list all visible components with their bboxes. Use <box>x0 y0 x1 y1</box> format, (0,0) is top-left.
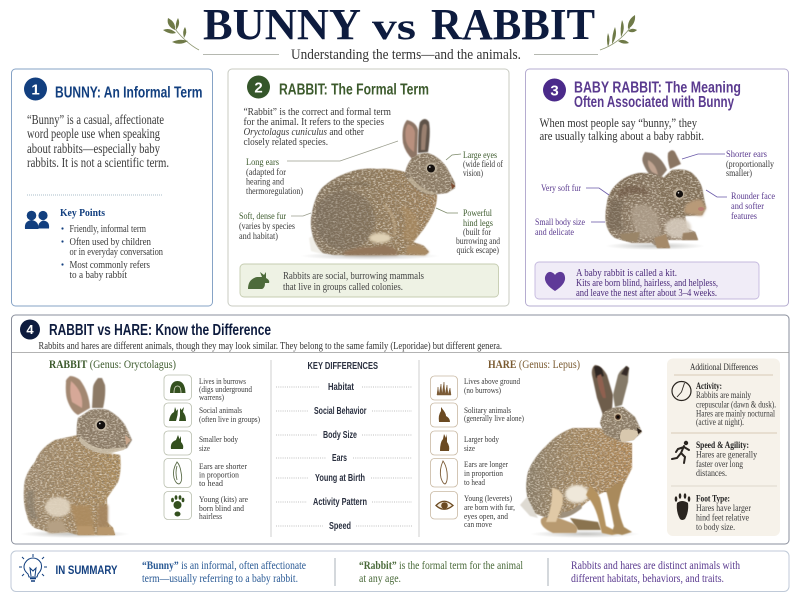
label: small body <box>535 217 585 237</box>
text block: rabbit definition: Oryctolagus cuniculus and other <box>244 126 364 138</box>
title <box>203 0 595 49</box>
label: large eyes: vision) <box>463 168 483 178</box>
text: hare traits: eyes open, and <box>464 511 509 521</box>
icon: heart <box>545 272 565 291</box>
icon: left leaf sprig <box>163 18 199 50</box>
text block: rabbit definition: for the animal. It refers to the species <box>244 116 384 128</box>
icon: short ear <box>164 458 192 488</box>
text: rabbit traits <box>199 376 260 521</box>
leader: hind legs <box>436 208 458 213</box>
heading: baby rabbit: Often Associated with Bunny <box>574 94 734 111</box>
list: key points: Most commonly refers <box>70 260 150 271</box>
title: BUNNY <box>203 0 361 49</box>
row: social behavior: Social Behavior <box>314 406 367 417</box>
text: rabbit traits: (digs underground <box>199 384 252 394</box>
icon: eye <box>430 492 458 519</box>
text: foot type: hind feet relative <box>696 512 749 524</box>
text: hare traits: Solitary animals <box>464 405 511 415</box>
leader: rounder face <box>706 190 727 197</box>
badge 1 <box>24 78 47 100</box>
label: long ears: (adapted for <box>246 167 286 177</box>
heading: additional differences: Additional Differences <box>690 362 758 372</box>
list: rabbit traits <box>164 375 260 521</box>
text: colonies: Rabbits are social, burrowing mammals <box>283 270 424 282</box>
text: foot type <box>696 494 752 533</box>
text block: bunny definition: word people use when speaking <box>27 126 160 141</box>
text: rabbit traits: Smaller body <box>199 434 238 444</box>
heading: baby rabbit <box>574 80 741 111</box>
row: body size <box>276 430 412 441</box>
text: colonies: that live in groups called colonies. <box>283 281 403 293</box>
text: rabbit traits: Ears are shorter <box>199 461 247 471</box>
label: soft fur <box>239 211 295 241</box>
list: key points <box>61 224 164 281</box>
text: speed and agility <box>696 441 757 479</box>
text: kit <box>576 267 718 299</box>
icon: small rabbit <box>164 431 192 455</box>
label: shorter ears: (proportionally <box>726 159 774 169</box>
text block: baby rabbit intro: are usually talking about a baby rabbit. <box>540 129 704 143</box>
label: rounder face: and softer <box>731 201 764 211</box>
badge 3 <box>543 78 566 102</box>
text: summary hare <box>571 558 740 585</box>
badge 2 <box>247 76 270 98</box>
heading: bunny: BUNNY: An Informal Term <box>55 84 202 102</box>
panel: additional differences <box>667 358 780 536</box>
label: long ears: thermoregulation) <box>246 186 303 196</box>
text: section intro: Rabbits and hares are different animals, though they may look similar. They belong to the same family (Leporidae) but different genera. <box>38 341 502 352</box>
icon: two rabbits <box>164 403 192 427</box>
panel 1: bunny <box>12 69 212 306</box>
label: shorter ears <box>726 149 774 178</box>
text: rabbit traits: Social animals <box>199 405 242 415</box>
text: hare traits: Lives above ground <box>464 376 520 386</box>
label: hind legs <box>456 208 500 255</box>
heading: key points: Key Points <box>60 207 106 219</box>
text: summary bunny: term—usually referring to a baby rabbit. <box>142 571 298 585</box>
icon: solitary hare <box>430 403 458 427</box>
label: long ears: hearing and <box>246 176 284 186</box>
text: hare traits: to head <box>464 477 485 487</box>
illustration: baby rabbit <box>605 150 706 250</box>
row: young at birth: Young at Birth <box>315 473 365 484</box>
label: large eyes <box>463 150 504 178</box>
label: in summary: IN SUMMARY <box>56 563 118 577</box>
row: habitat <box>276 382 412 393</box>
text block: bunny definition: about rabbits—especially baby <box>27 141 160 156</box>
text: summary rabbit: at any age. <box>359 571 401 585</box>
row: habitat: Habitat <box>328 382 355 393</box>
icon: hare foot <box>675 493 690 520</box>
label: large eyes: Large eyes <box>463 150 497 160</box>
heading: key differences: KEY DIFFERENCES <box>308 361 378 372</box>
text: hare traits: Ears are longer <box>464 459 508 469</box>
label: small body: and delicate <box>535 227 574 237</box>
text: activity: Activity: <box>696 382 722 392</box>
text: rabbit traits: (often live in groups) <box>199 414 260 424</box>
text: activity: Rabbits are mainly <box>696 391 751 401</box>
text: speed and agility: Hares are generally <box>696 450 757 460</box>
key differences column <box>276 361 412 532</box>
icon: paw <box>164 492 192 520</box>
list: key points: Friendly, informal term <box>70 224 146 235</box>
badge 2: 2 <box>254 80 263 96</box>
text block: bunny definition: rabbits. It is not a scientific term. <box>27 155 169 170</box>
row: speed: Speed <box>329 521 351 532</box>
text: activity: (active at night). <box>696 417 744 428</box>
icon: lightbulb <box>19 554 47 581</box>
text block: bunny definition: “Bunny” is a casual, affectionate <box>27 112 164 127</box>
text block: rabbit definition: closely related species. <box>244 136 328 148</box>
list: hare traits <box>430 376 524 529</box>
list: key points: Often used by children <box>70 237 152 248</box>
label: soft fur: and habitat) <box>239 231 278 241</box>
label: shorter ears: smaller) <box>726 168 752 178</box>
text: rabbit traits: in proportion <box>199 470 240 480</box>
text: speed and agility: faster over long <box>696 459 743 470</box>
callout: colonies <box>240 264 498 297</box>
row: activity pattern: Activity Pattern <box>313 497 367 508</box>
icon: long ear <box>430 458 458 487</box>
badge 1: 1 <box>31 82 40 98</box>
label: hind legs: (built for <box>463 227 491 237</box>
heading: rabbit column: RABBIT (Genus: Oryctolagus) <box>49 357 176 371</box>
text: colonies <box>283 270 424 293</box>
text: rabbit traits: warrens) <box>199 392 224 402</box>
text: hare traits <box>464 376 524 529</box>
heading: rabbit vs hare: RABBIT vs HARE: Know the Difference <box>49 322 271 339</box>
leader: very soft fur <box>586 188 609 195</box>
text block: baby rabbit intro <box>540 116 704 143</box>
text: hare traits: (generally live alone) <box>464 413 524 423</box>
text block: baby rabbit intro: When most people say “bunny,” they <box>540 116 697 130</box>
text: activity: crepuscular (dawn & dusk). <box>696 400 776 410</box>
row: ears: Ears <box>332 453 347 464</box>
text: speed and agility: Speed & Agility: <box>696 441 749 451</box>
illustration: adult rabbit side view <box>300 119 456 260</box>
panel 4: rabbit vs hare <box>12 315 789 544</box>
label: rounder face: features <box>731 211 757 221</box>
text: kit: and leave the nest after about 3–4 weeks. <box>576 287 717 299</box>
icon: grass <box>430 376 458 400</box>
text: rabbit traits: size <box>199 443 210 453</box>
icon: burrow <box>164 375 192 400</box>
text: summary rabbit: “Rabbit” is the formal term for the animal <box>359 558 524 572</box>
row: activity pattern <box>276 497 412 508</box>
leader: large eyes <box>446 154 461 160</box>
text: kit: A baby rabbit is called a kit. <box>576 267 677 279</box>
panel 3: baby rabbit <box>526 69 788 306</box>
text: rabbit traits: born blind and <box>199 503 245 513</box>
icon: runner <box>672 441 689 463</box>
leader: shorter ears <box>682 154 725 159</box>
text: summary bunny: “Bunny” is an informal, often affectionate <box>142 558 306 572</box>
text: rabbit traits: Young (kits) are <box>199 494 248 504</box>
icon: people <box>25 211 49 229</box>
text: hare traits: are born with fur, <box>464 502 515 512</box>
heading: baby rabbit: BABY RABBIT: The Meaning <box>574 80 741 96</box>
text: summary bunny <box>142 558 306 585</box>
label: hind legs: hind legs <box>463 218 493 228</box>
row: social behavior <box>276 406 412 417</box>
title: vs <box>372 6 416 48</box>
leader: long ears <box>287 141 398 161</box>
badge 4 <box>20 320 40 340</box>
illustration: hare <box>520 365 642 538</box>
text: foot type: Hares have larger <box>696 504 752 514</box>
text: summary rabbit <box>359 558 524 585</box>
text: hare traits: Larger body <box>464 434 499 444</box>
leader: small body <box>591 221 605 223</box>
row: speed <box>276 521 412 532</box>
icon: right leaf sprig <box>600 15 637 50</box>
panel 2: rabbit <box>228 69 509 306</box>
text: speed and agility: distances. <box>696 469 727 479</box>
label: very soft fur: Very soft fur <box>541 183 581 193</box>
text block: rabbit definition: “Rabbit” is the correct and formal term <box>244 106 392 118</box>
label: rounder face <box>731 191 775 221</box>
label: small body: Small body size <box>535 217 585 227</box>
icon: rabbit silhouette <box>248 272 269 289</box>
text: foot type: Foot Type: <box>696 494 730 504</box>
row: young at birth <box>276 473 412 484</box>
list: key points: or in everyday conversation <box>70 247 164 258</box>
subtitle: Understanding the terms—and the animals. <box>291 47 521 63</box>
callout: kit <box>535 262 759 299</box>
label: hind legs: Powerful <box>463 208 492 218</box>
label: hind legs: quick escape) <box>456 245 499 255</box>
text: hare traits: in proportion <box>464 468 504 478</box>
label: shorter ears: Shorter ears <box>726 149 767 159</box>
leader: soft fur <box>291 213 311 216</box>
text: hare traits: size <box>464 443 475 453</box>
text: rabbit traits: Lives in burrows <box>199 376 246 386</box>
row: ears <box>276 453 412 464</box>
text: kit: Kits are born blind, hairless, and helpless, <box>576 277 718 289</box>
label: large eyes: (wide field of <box>463 159 504 169</box>
text: foot type: to body size. <box>696 523 735 533</box>
title: RABBIT <box>431 0 595 49</box>
text: hare traits: Young (leverets) <box>464 493 512 503</box>
text: rabbit traits: to head <box>199 478 224 488</box>
text block: rabbit definition <box>244 106 392 148</box>
label: long ears: Long ears <box>246 157 279 167</box>
illustration: sitting rabbit <box>20 376 132 538</box>
text block: bunny definition <box>27 112 169 170</box>
text: hare traits: can move <box>464 519 492 529</box>
text: rabbit traits: hairless <box>199 511 222 521</box>
text: summary hare: different habitats, behaviors, and traits. <box>571 571 724 585</box>
icon: clock <box>672 382 691 400</box>
label: long ears <box>246 157 303 196</box>
text: hare traits: (no burrows) <box>464 385 501 395</box>
icon: large hare <box>430 431 458 455</box>
subtitle rules <box>203 54 598 56</box>
label: soft fur: (varies by species <box>239 221 295 231</box>
row: body size: Body Size <box>323 430 357 441</box>
panel: summary <box>11 551 789 592</box>
badge 4: 4 <box>26 322 34 337</box>
heading: hare column: HARE (Genus: Lepus) <box>488 357 580 371</box>
label: rounder face: Rounder face <box>731 191 775 201</box>
text: activity: Hares are mainly nocturnal <box>696 410 775 420</box>
badge 3: 3 <box>550 82 559 100</box>
text: activity <box>696 382 776 428</box>
list: key points: to a baby rabbit <box>70 270 127 281</box>
heading: rabbit: RABBIT: The Formal Term <box>279 82 429 98</box>
label: hind legs: burrowing and <box>456 236 500 246</box>
text: summary hare: Rabbits and hares are distinct animals with <box>571 558 740 572</box>
label: soft fur: Soft, dense fur <box>239 211 286 221</box>
